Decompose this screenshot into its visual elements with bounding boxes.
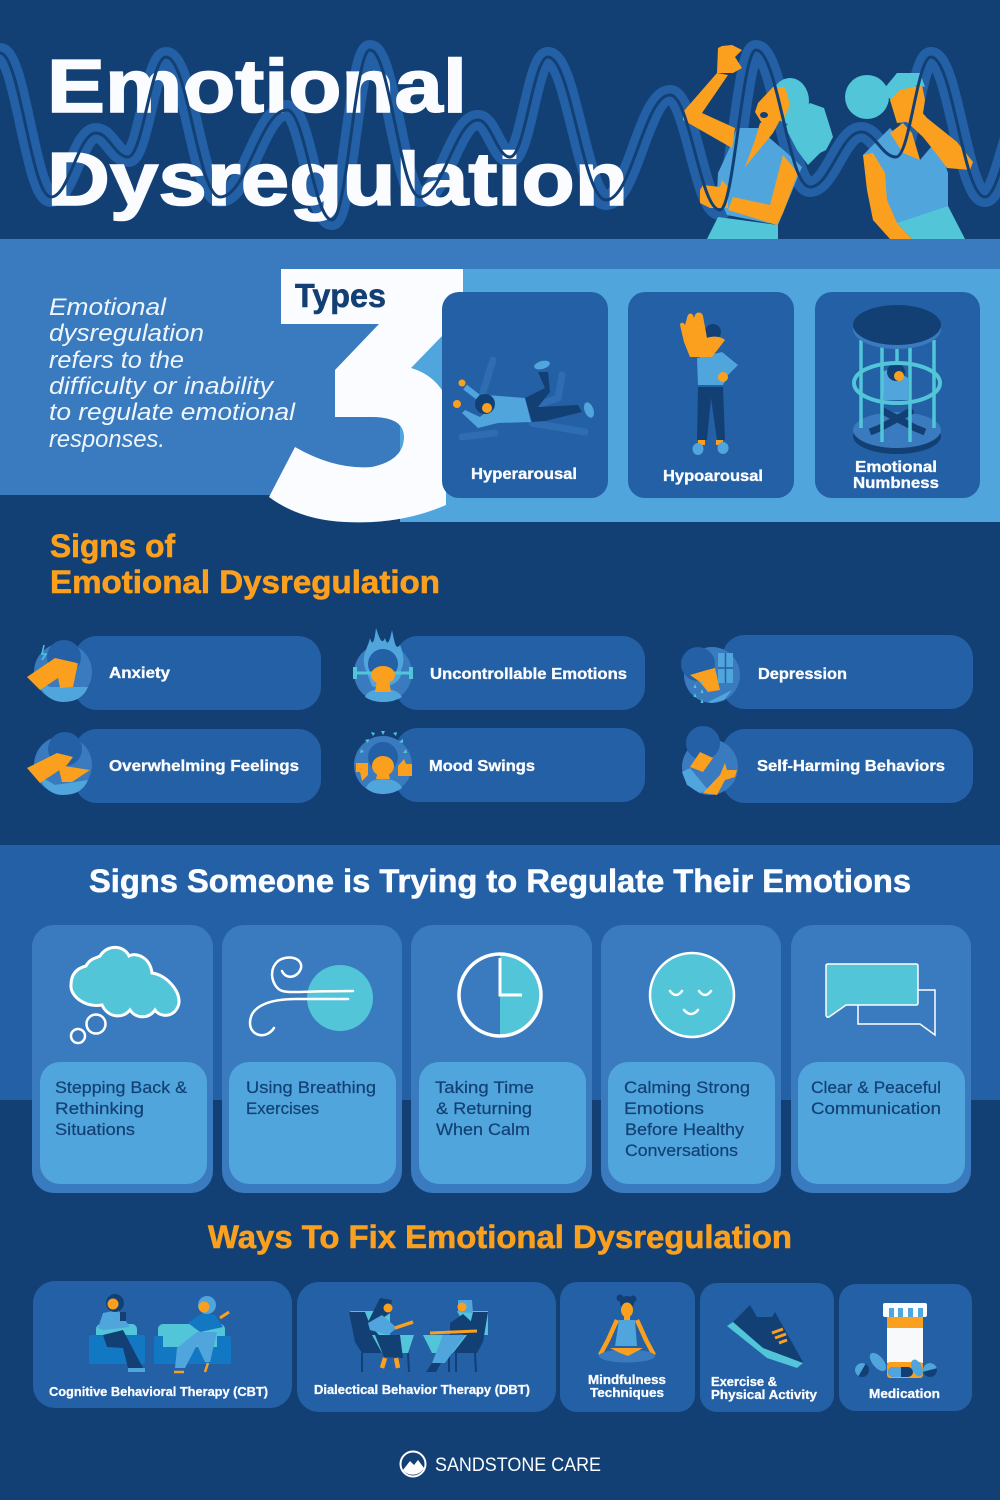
intro text <box>49 294 296 453</box>
card: emotional numbness: Numbness <box>853 475 939 492</box>
intro text: to regulate emotional <box>49 399 296 426</box>
card: communication <box>791 925 971 1193</box>
card: medication: Medication <box>869 1386 940 1401</box>
intro text: Emotional <box>49 294 167 321</box>
card: mindfulness <box>560 1282 695 1412</box>
card: hypoarousal <box>628 292 794 498</box>
sign: overwhelming feelings <box>27 729 321 803</box>
heading: signs of emotional dysregulation: Emotional Dysregulation <box>50 564 440 600</box>
card: taking time: Taking Time <box>435 1078 534 1097</box>
heading: ways to fix: Ways To Fix Emotional Dysregulation <box>208 1219 792 1255</box>
intro text: responses. <box>49 426 165 453</box>
wave background <box>0 50 1000 220</box>
label: Hyperarousal <box>471 466 577 483</box>
card: DBT <box>297 1282 556 1412</box>
sign: anxiety: Anxiety <box>109 665 170 682</box>
sign: depression <box>681 635 973 709</box>
sign: self-harming behaviors: Self-Harming Behaviors <box>757 758 945 775</box>
card: communication: Communication <box>811 1099 941 1118</box>
intro text: difficulty or inability <box>49 373 275 400</box>
card: exercise: Exercise & <box>711 1374 777 1389</box>
card: stepping back: Stepping Back & <box>55 1078 188 1097</box>
card: taking time: When Calm <box>436 1120 530 1139</box>
intro text: dysregulation <box>49 320 204 347</box>
header: title and figures <box>0 44 1000 239</box>
card: stepping back: Situations <box>55 1120 135 1139</box>
card: stepping back <box>32 925 213 1193</box>
label: Emotional <box>855 459 937 476</box>
logo: sandstone care <box>400 1452 601 1476</box>
sign: anxiety <box>27 636 321 710</box>
logo: sandstone care: SANDSTONE CARE <box>435 1455 601 1476</box>
types label: Types <box>295 277 386 314</box>
card: mindfulness: Mindfulness <box>588 1372 666 1387</box>
card: DBT: Dialectical Behavior Therapy (DBT) <box>314 1382 530 1397</box>
sign: depression: Depression <box>758 666 847 683</box>
sign: self-harming behaviors <box>682 726 973 803</box>
card: taking time <box>411 925 592 1193</box>
card: emotional numbness <box>815 292 980 498</box>
title: Emotional <box>47 44 467 128</box>
card: CBT <box>33 1281 292 1408</box>
card: taking time: & Returning <box>436 1099 532 1118</box>
label: Hypoarousal <box>663 468 763 485</box>
heading: signs of emotional dysregulation <box>50 528 440 600</box>
card: breathing: Using Breathing <box>246 1078 376 1097</box>
card: calming <box>601 925 781 1193</box>
card: calming: Conversations <box>625 1141 738 1160</box>
card: calming: Before Healthy <box>625 1120 745 1139</box>
signs list <box>27 628 973 803</box>
big numeral 3 <box>269 269 463 522</box>
sign: mood swings: Mood Swings <box>429 758 535 775</box>
intro text: refers to the <box>49 347 184 374</box>
card: exercise: Physical Activity <box>711 1387 818 1402</box>
title: Dysregulation <box>47 137 628 221</box>
card: stepping back: Rethinking <box>55 1099 144 1118</box>
card: mindfulness: Techniques <box>590 1385 664 1400</box>
panel: 3 types <box>0 239 1000 522</box>
card: communication: Clear & Peaceful <box>811 1078 941 1097</box>
card: breathing <box>222 925 402 1193</box>
card: hyperarousal <box>442 292 608 498</box>
figure: right woman <box>845 73 973 239</box>
card: calming: Emotions <box>624 1099 704 1118</box>
sign: overwhelming feelings: Overwhelming Feelings <box>109 758 299 775</box>
sign: mood swings <box>354 728 645 802</box>
card: calming: Calming Strong <box>624 1078 750 1097</box>
card: medication <box>839 1284 972 1411</box>
panel: signs someone is trying to regulate <box>0 845 1000 1193</box>
card: CBT: Cognitive Behavioral Therapy (CBT) <box>49 1384 268 1399</box>
card: breathing: Exercises <box>246 1099 319 1118</box>
title <box>47 44 628 221</box>
sign: uncontrollable emotions <box>354 628 645 710</box>
card: exercise <box>700 1283 834 1412</box>
thin wave line <box>0 50 1000 220</box>
heading: Signs Someone is Trying to Regulate Their Emotions <box>89 863 911 899</box>
heading: signs of emotional dysregulation: Signs of <box>50 528 175 564</box>
sign: uncontrollable emotions: Uncontrollable Emotions <box>430 666 627 683</box>
figure: left woman <box>683 45 833 239</box>
